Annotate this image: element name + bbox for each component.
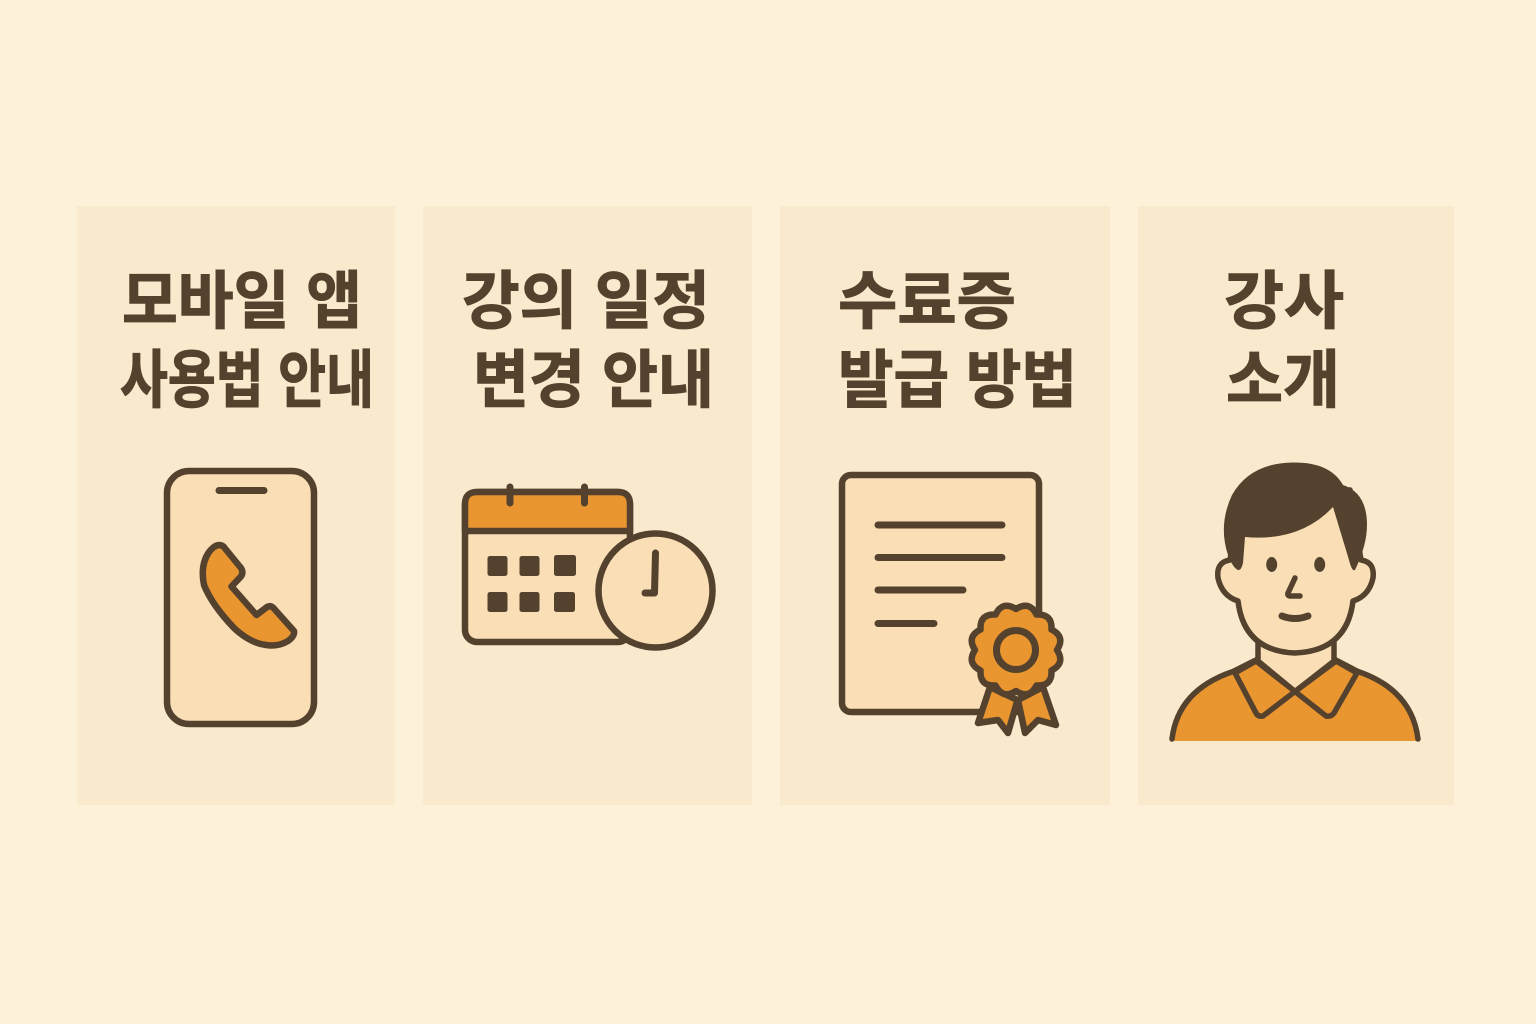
heading: schedule change notice [462,267,714,416]
icon: calendar and clock [465,487,712,648]
heading: certificate issuance method [838,267,1077,416]
heading: mobile app usage: 모바일 앱 [122,267,362,337]
heading: mobile app usage: 사용법 안내 [120,346,374,416]
heading: instructor introduction: 소개 [1226,346,1340,416]
heading: schedule change notice: 강의 일정 [462,267,710,337]
panel: certificate issuance [780,206,1110,805]
heading: instructor introduction: 강사 [1224,267,1344,337]
icon: instructor portrait [1172,462,1418,741]
icon: certificate with rosette [842,475,1060,733]
heading: mobile app usage [120,267,374,416]
panel: lecture schedule change [423,206,752,805]
icon: smartphone with handset [167,471,314,724]
heading: instructor introduction [1224,267,1344,416]
heading: certificate issuance method: 수료증 [838,267,1016,337]
heading: certificate issuance method: 발급 방법 [838,346,1077,416]
panel: mobile app guide [77,206,395,805]
heading: schedule change notice: 변경 안내 [473,346,714,416]
panel: instructor introduction [1138,206,1454,805]
